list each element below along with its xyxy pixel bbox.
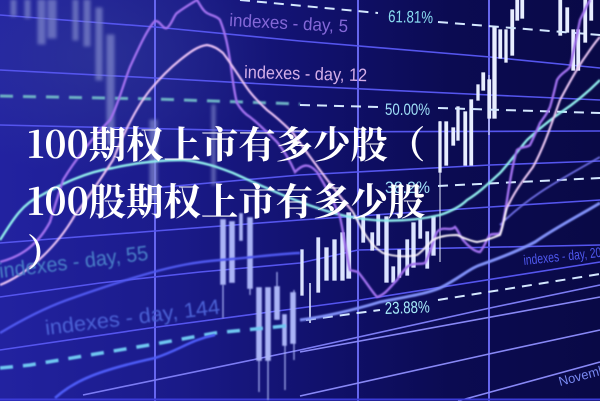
stock chart background: indexes - day, 55 [0, 242, 149, 283]
blurred candlesticks left [11, 0, 215, 200]
candlesticks centre [221, 214, 295, 400]
chart labels: 38.2% [385, 178, 430, 197]
candlesticks lower right [301, 213, 435, 323]
title: 100期权上市有多少股（ [27, 115, 425, 169]
candlesticks right [439, 0, 592, 262]
chart labels: indexes - day, 5 [229, 10, 349, 36]
chart labels: 23.88% [384, 297, 430, 318]
chart labels [229, 7, 600, 389]
title: 100股期权上市有多少股 [27, 172, 425, 226]
chart labels: 61.81% [388, 7, 433, 27]
stock chart background: indexes - day, 144 [44, 296, 222, 340]
title: ） [27, 223, 64, 277]
chart labels: indexes - day, 12 [244, 62, 367, 85]
fibonacci dashed levels [0, 96, 300, 368]
chart labels: 50.00% [385, 100, 430, 119]
